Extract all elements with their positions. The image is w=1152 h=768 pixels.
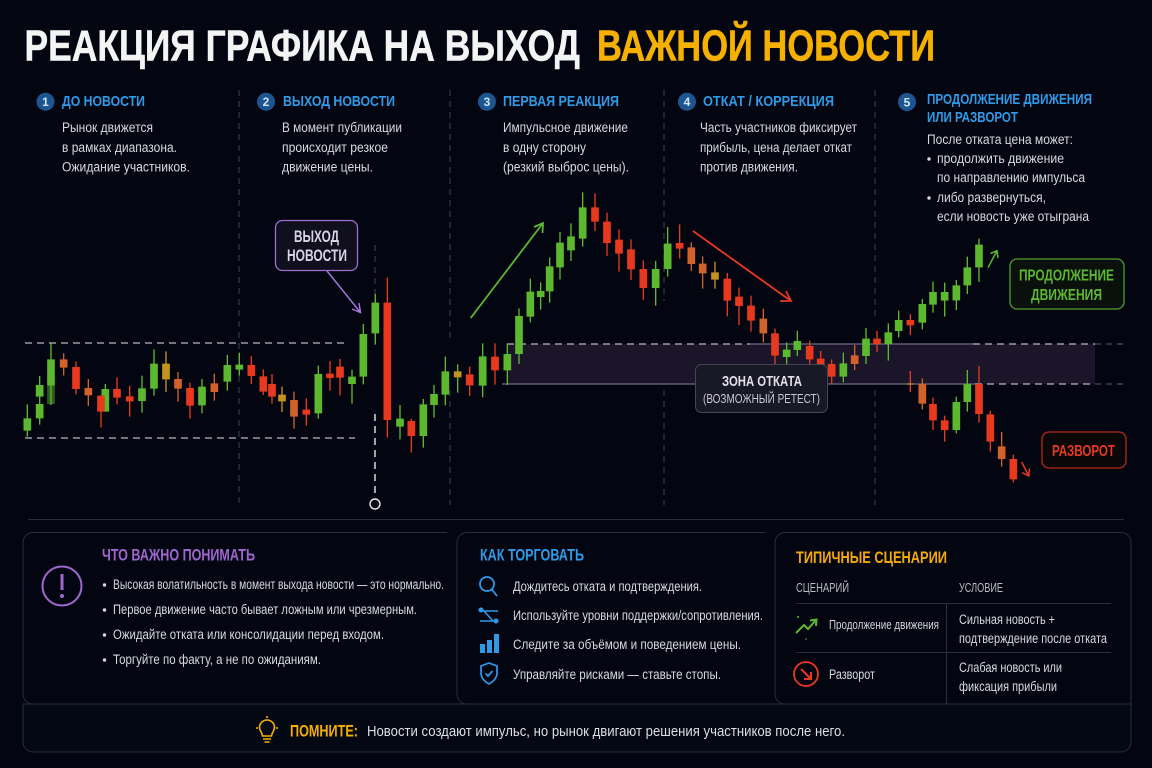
step 2: news release: происходит резкое — [282, 140, 388, 155]
candles: continuation and reversal — [810, 239, 1013, 482]
icon: light bulb — [256, 716, 278, 742]
label: continuation: ДВИЖЕНИЯ — [1031, 287, 1102, 304]
icon: exclamation — [42, 566, 82, 606]
panel: how to trade: Дождитесь отката и подтверждения. — [513, 579, 702, 594]
step 1: before news: Ожидание участников. — [62, 160, 190, 174]
panel: typical scenarios: СЦЕНАРИЙ — [796, 580, 849, 595]
step 4: pullback — [678, 93, 857, 174]
step 5: continuation or reversal: После отката цена может: — [927, 132, 1073, 147]
panel: typical scenarios — [775, 532, 1131, 704]
step 4: pullback: прибыль, цена делает откат — [700, 140, 852, 155]
step 3: first reaction: в одну сторону — [503, 140, 586, 155]
icon: reversal circle — [794, 662, 818, 686]
panel: what to understand — [23, 532, 447, 704]
step 3: first reaction: Импульсное движение — [503, 120, 628, 135]
step 2: news release: В момент публикации — [282, 120, 402, 135]
label: pullback zone — [696, 364, 828, 412]
icon: magnifier — [480, 577, 497, 596]
icon: volume bars — [480, 634, 499, 653]
panel: what to understand: Ожидайте отката или консолидации перед входом. — [113, 627, 384, 642]
title: ВАЖНОЙ НОВОСТИ — [597, 20, 935, 70]
panel: typical scenarios: фиксация прибыли — [959, 679, 1057, 694]
step 4: pullback: против движения. — [700, 160, 798, 174]
panel: what to understand: Высокая волатильность в момент выхода новости — это нормально. — [113, 577, 444, 592]
step 5: continuation or reversal: если новость уже отыграна — [937, 209, 1089, 224]
news release marker line — [370, 245, 380, 509]
step 5: continuation or reversal: 5 — [904, 95, 911, 109]
panel: how to trade: Используйте уровни поддержки/сопротивления. — [513, 608, 763, 623]
panel: what to understand: ЧТО ВАЖНО ПОНИМАТЬ — [102, 546, 255, 564]
step 2: news release: ВЫХОД НОВОСТИ — [283, 93, 395, 110]
step 3: first reaction — [478, 93, 629, 174]
step 2: news release: движение цены. — [282, 160, 373, 174]
step 1: before news: Рынок движется — [62, 120, 153, 135]
panel: how to trade — [457, 532, 765, 704]
label: news release: НОВОСТИ — [287, 247, 347, 265]
label: pullback zone: ЗОНА ОТКАТА — [722, 373, 802, 390]
panel: typical scenarios: подтверждение после отката — [959, 631, 1107, 646]
panel: how to trade: Управляйте рисками — ставьте стопы. — [513, 667, 721, 682]
step 5: continuation or reversal: либо развернуться, — [937, 190, 1046, 205]
step 2: news release — [257, 93, 402, 174]
step 5: continuation or reversal: продолжить движение — [937, 151, 1064, 166]
pullback zone — [507, 344, 1095, 384]
panel: typical scenarios: Разворот — [829, 667, 875, 682]
panel: typical scenarios: УСЛОВИЕ — [959, 580, 1003, 595]
panel: typical scenarios: Продолжение движения — [829, 617, 939, 632]
label: news release: ВЫХОД — [294, 228, 339, 246]
step 1: before news — [36, 93, 190, 174]
arrow: to news candle — [327, 271, 360, 312]
candles: range and news spike — [27, 277, 387, 438]
step 4: pullback: ОТКАТ / КОРРЕКЦИЯ — [703, 93, 834, 110]
step 5: continuation or reversal: ПРОДОЛЖЕНИЕ ДВИЖЕНИЯ — [927, 91, 1092, 108]
step 3: first reaction: (резкий выброс цены). — [503, 160, 629, 174]
arrow: impulse up — [471, 223, 543, 318]
step 1: before news: в рамках диапазона. — [62, 140, 177, 155]
step 5: continuation or reversal: ИЛИ РАЗВОРОТ — [927, 109, 1018, 126]
step 1: before news: 1 — [42, 95, 49, 109]
step 5: continuation or reversal: по направлению импульса — [937, 170, 1085, 185]
label: continuation: ПРОДОЛЖЕНИЕ — [1019, 268, 1114, 284]
arrow: continuation — [988, 251, 998, 268]
panel: typical scenarios: Слабая новость или — [959, 660, 1062, 675]
arrow: pullback down — [693, 231, 791, 301]
candlestick chart — [27, 192, 1013, 482]
panel: how to trade: Следите за объёмом и поведением цены. — [513, 637, 741, 652]
step 4: pullback: Часть участников фиксирует — [700, 120, 857, 135]
panel: remember — [23, 704, 1131, 752]
panel: remember: Новости создают импульс, но рынок двигают решения участников после него. — [367, 723, 845, 740]
label: continuation — [1010, 259, 1124, 309]
panel: typical scenarios: Сильная новость + — [959, 612, 1055, 627]
step 4: pullback: 4 — [684, 95, 691, 109]
step 1: before news: ДО НОВОСТИ — [62, 93, 145, 110]
label: reversal: РАЗВОРОТ — [1052, 443, 1115, 460]
step 3: first reaction: ПЕРВАЯ РЕАКЦИЯ — [503, 93, 619, 110]
panel: how to trade: КАК ТОРГОВАТЬ — [480, 546, 584, 564]
label: reversal — [1042, 432, 1126, 468]
panel: remember: ПОМНИТЕ: — [290, 722, 358, 740]
panel: what to understand: Первое движение часто бывает ложным или чрезмерным. — [113, 602, 417, 617]
icon: shield — [481, 663, 497, 684]
step 2: news release: 2 — [263, 95, 270, 109]
step 3: first reaction: 3 — [484, 95, 491, 109]
candles: impulse and pullback — [400, 192, 797, 453]
panel: what to understand: Торгуйте по факту, а не по ожиданиям. — [113, 652, 321, 667]
title: РЕАКЦИЯ ГРАФИКА НА ВЫХОД — [24, 22, 580, 70]
step 5: continuation or reversal — [898, 91, 1092, 224]
icon: trend up — [796, 616, 816, 640]
label: news release — [276, 220, 358, 270]
panel: typical scenarios: ТИПИЧНЫЕ СЦЕНАРИИ — [796, 549, 947, 567]
arrow: reversal — [1022, 462, 1030, 476]
label: pullback zone: (ВОЗМОЖНЫЙ РЕТЕСТ) — [703, 391, 820, 406]
icon: levels — [479, 608, 498, 623]
